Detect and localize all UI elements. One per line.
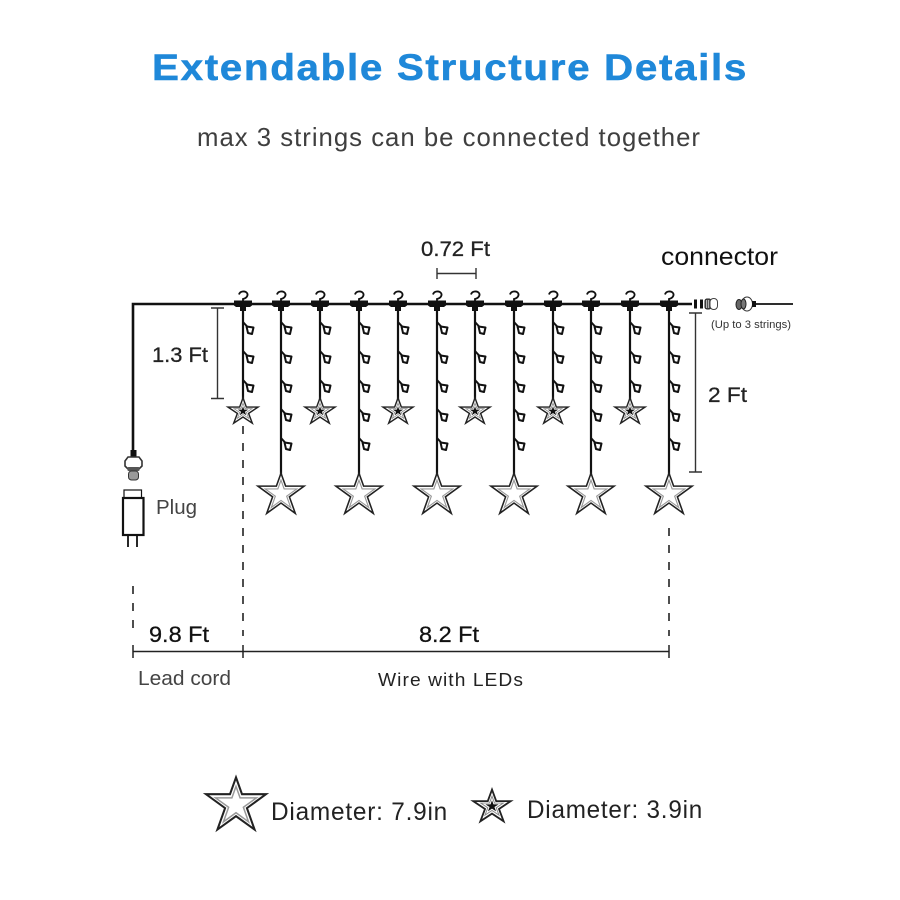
legend: large star: Diameter: 7.9in (271, 798, 448, 826)
short strand 5 (538, 291, 568, 423)
light string diagram (123, 243, 793, 547)
dimension: 2 Ft: 2 Ft (708, 383, 747, 407)
plug label: Plug (156, 496, 197, 519)
long strand 1 (258, 291, 304, 513)
long strand 5 (568, 291, 614, 513)
long strand 6 (646, 291, 692, 513)
dimension: 0.72 Ft: 0.72 Ft (421, 237, 490, 261)
label: 8.2 Ft: 8.2 Ft (419, 622, 479, 647)
connector label: connector (661, 243, 778, 271)
short strand 4 (460, 291, 490, 423)
length scale bar (133, 645, 669, 658)
icon: plug (123, 490, 144, 547)
connector note: (Up to 3 strings) (711, 319, 791, 331)
long strand 3 (414, 291, 460, 513)
dimension: 2 Ft (689, 313, 747, 472)
short strand 1 (228, 291, 258, 423)
icon: female connector (736, 297, 793, 311)
short strand 2 (305, 291, 335, 423)
legend: small star: Diameter: 3.9in (527, 796, 703, 824)
dimension: 1.3 Ft (152, 308, 224, 398)
dimension: 0.72 Ft (421, 237, 490, 279)
icon: plug socket (125, 450, 142, 480)
label: 9.8 Ft: 9.8 Ft (149, 622, 209, 647)
label: lead cord: Lead cord (138, 668, 231, 690)
dashed guide lines (133, 426, 669, 636)
legend: small star (473, 790, 703, 824)
legend: large star (206, 777, 448, 830)
long strand 2 (336, 291, 382, 513)
subtitle: max 3 strings can be connected together (197, 122, 701, 152)
dimension: 1.3 Ft: 1.3 Ft (152, 343, 208, 367)
short strand 3 (383, 291, 413, 423)
main wire (133, 304, 692, 454)
icon: male connector (694, 298, 718, 310)
short strand 6 (615, 291, 645, 423)
long strand 4 (491, 291, 537, 513)
title: Extendable Structure Details (152, 46, 748, 88)
label: wire with LEDs: Wire with LEDs (378, 670, 524, 690)
